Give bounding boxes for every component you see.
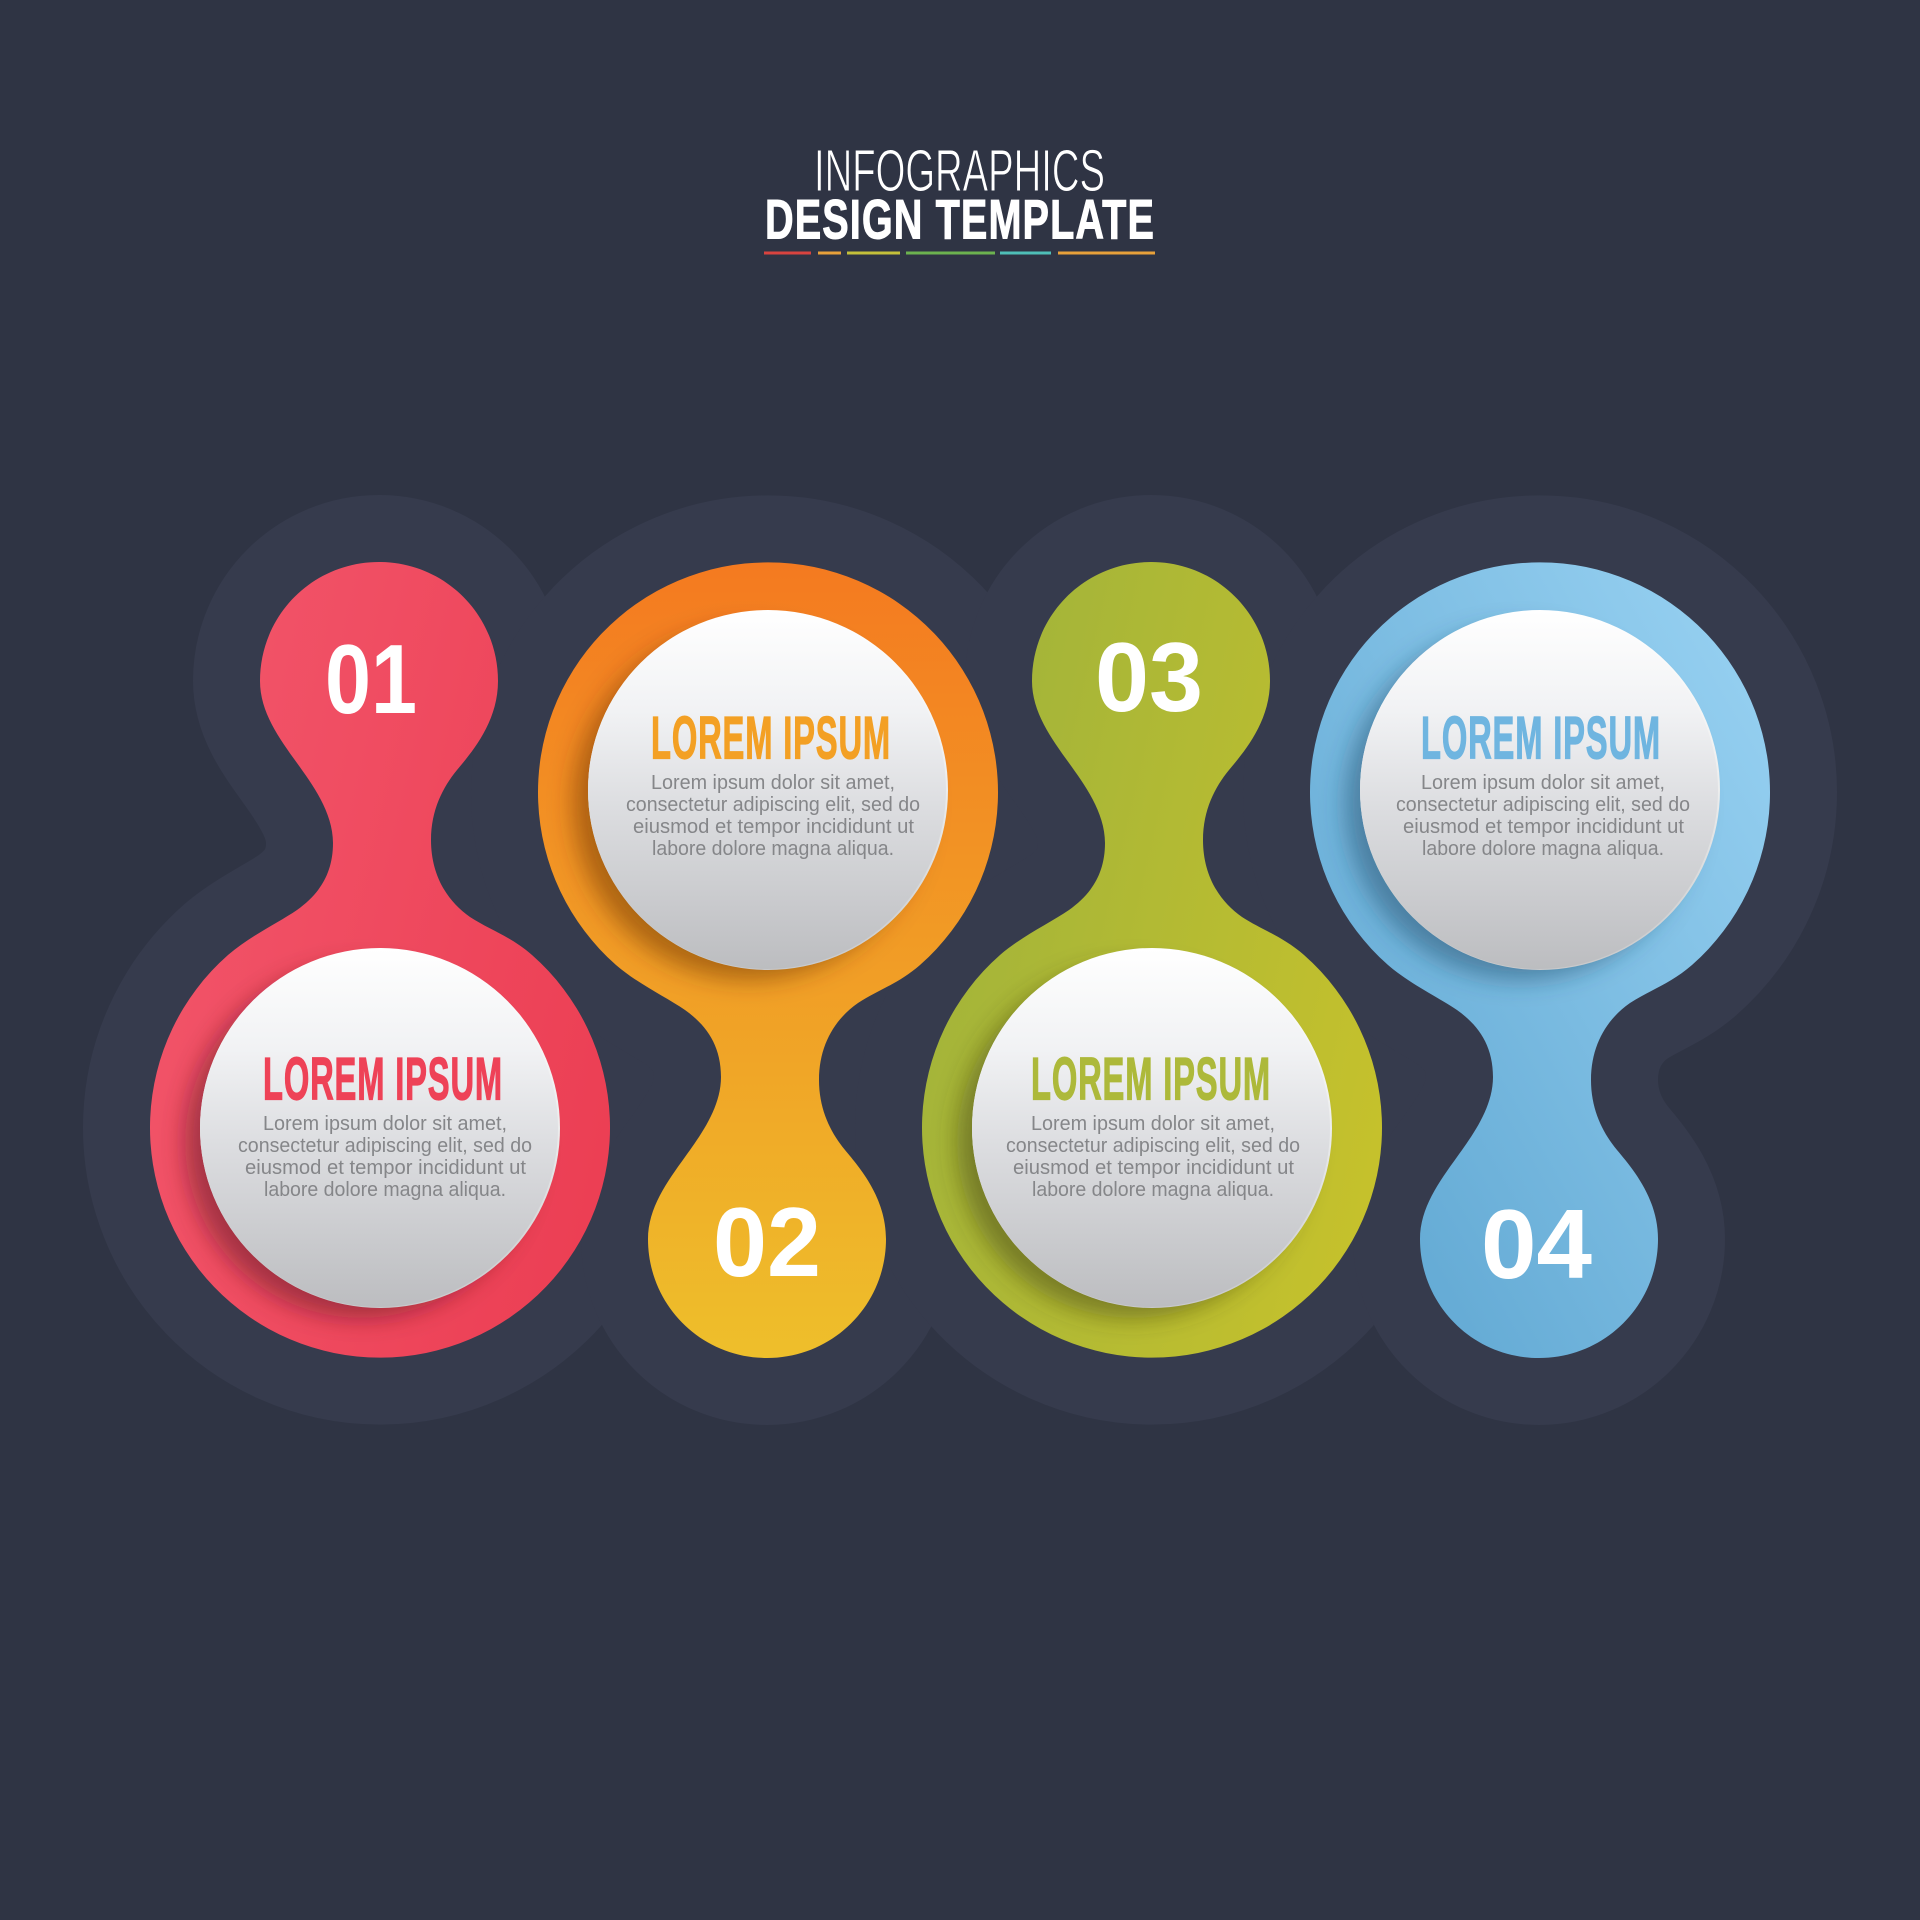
number 03: 03: [1095, 622, 1203, 732]
white circle: [588, 610, 948, 970]
body text: [238, 1113, 532, 1201]
number 02: 02: [713, 1187, 821, 1297]
body text: labore dolore magna aliqua.: [264, 1179, 506, 1201]
body text: consectetur adipiscing elit, sed do: [238, 1135, 532, 1157]
panel: step 02: [538, 562, 998, 1358]
body text: labore dolore magna aliqua.: [1032, 1179, 1274, 1201]
body text: eiusmod et tempor incididunt ut: [1403, 816, 1684, 838]
shadow under circle: [573, 628, 925, 980]
halo behind all four shapes: [150, 562, 1770, 1358]
number 01: 01: [325, 624, 417, 734]
olive blob: [922, 562, 1382, 1358]
blue blob: [1310, 562, 1770, 1358]
coloured title underline: [764, 252, 1155, 254]
shadow under circle: [957, 966, 1309, 1318]
heading: LOREM IPSUM: [263, 1046, 503, 1112]
body text: labore dolore magna aliqua.: [1422, 838, 1664, 860]
body text: [1396, 772, 1690, 860]
body text: Lorem ipsum dolor sit amet,: [1421, 772, 1665, 794]
body text: labore dolore magna aliqua.: [652, 838, 894, 860]
heading: LOREM IPSUM: [1031, 1046, 1271, 1112]
body text: [1006, 1113, 1300, 1201]
shadow under circle: [1345, 628, 1697, 980]
white circle: [1360, 610, 1720, 970]
body text: Lorem ipsum dolor sit amet,: [1031, 1113, 1275, 1135]
title: [764, 138, 1155, 254]
body text: eiusmod et tempor incididunt ut: [245, 1157, 526, 1179]
body text: eiusmod et tempor incididunt ut: [1013, 1157, 1294, 1179]
panel: step 03: [922, 562, 1382, 1358]
white circle: [972, 948, 1332, 1308]
title line: infographics: INFOGRAPHICS: [814, 138, 1105, 204]
shadow under circle: [185, 966, 537, 1318]
orange blob: [538, 562, 998, 1358]
body text: eiusmod et tempor incididunt ut: [633, 816, 914, 838]
body text: Lorem ipsum dolor sit amet,: [651, 772, 895, 794]
body text: consectetur adipiscing elit, sed do: [1396, 794, 1690, 816]
title line: design template: DESIGN TEMPLATE: [765, 188, 1155, 250]
heading: LOREM IPSUM: [1421, 704, 1661, 772]
heading: LOREM IPSUM: [651, 704, 891, 772]
body text: [626, 772, 920, 860]
panel: step 01: [150, 562, 610, 1358]
panel: step 04: [1310, 562, 1770, 1358]
white circle: [200, 948, 560, 1308]
body text: consectetur adipiscing elit, sed do: [626, 794, 920, 816]
body text: consectetur adipiscing elit, sed do: [1006, 1135, 1300, 1157]
body text: Lorem ipsum dolor sit amet,: [263, 1113, 507, 1135]
number 04: 04: [1481, 1189, 1592, 1299]
red blob: [150, 562, 610, 1358]
